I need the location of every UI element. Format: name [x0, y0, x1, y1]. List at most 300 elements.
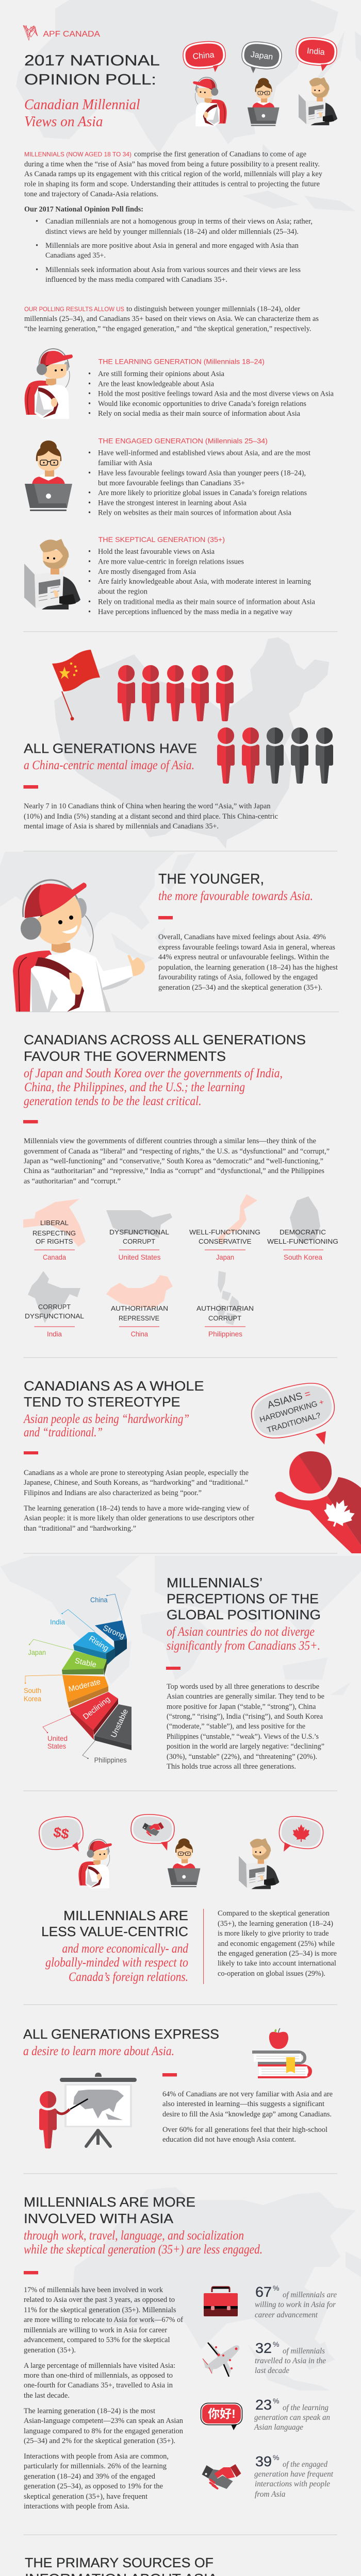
text block: poll findings: distinct views are held by younger millennials (18–24) and older millennials (25–34).: [45, 228, 299, 236]
body text: This holds true across all three generations.: [167, 1762, 296, 1771]
body text: Canadians as a whole are prone to stereotyping Asian people, especially the: [24, 1469, 249, 1477]
stat: 32% travelled: [203, 2340, 326, 2377]
country: United States: United States: [119, 1253, 161, 1261]
body text: favourability ratings of Asia, followed by the engaged: [158, 973, 318, 981]
label: United States: United: [47, 1734, 68, 1742]
text block: introduction: [24, 150, 323, 198]
body text: the engaged generation (25–34) is more: [218, 1950, 337, 1958]
subheading: [23, 1412, 189, 1439]
text block: poll findings: Canadian millennials are not a homogenous group in terms of their views on Asia; rather,: [45, 217, 313, 226]
bullet list: Have perceptions influenced by the mass media in a negative way: [98, 608, 293, 616]
bullet list: Are the least knowledgeable about Asia: [98, 380, 215, 388]
text block: introduction: MILLENNIALS (NOW AGED 18 TO 34): [24, 150, 132, 158]
bullet list: •: [88, 548, 91, 556]
body text: generation (25–34), as opposed to 19% for the: [24, 2482, 163, 2490]
label: India: [50, 1609, 95, 1632]
text block: polling results: to distinguish between younger millennials (18–24), older: [126, 305, 300, 313]
body text: and economic engagement (25%) while: [218, 1940, 335, 1948]
stat: 67% work in Asia: willing to work in Asia for: [255, 2300, 336, 2309]
body text: interactions with people from Asia.: [24, 2502, 129, 2511]
subheading: generation tends to be the least critical.: [24, 1094, 202, 1108]
stat: 23% language: [201, 2397, 330, 2432]
subheading: a China-centric mental image of Asia.: [24, 758, 194, 772]
body text: China as “authoritarian” and “repressive,” India as “corrupt” and “dysfunctional,” and the Philippines: [24, 1167, 324, 1175]
text block: introduction: during a time when the “rise of Asia” has moved from being a future possibility to a present reality.: [24, 160, 320, 168]
body text: more than one-third of millennials, as opposed to: [24, 2371, 173, 2380]
icon: plane: [203, 2343, 239, 2377]
country: Canada: Canada: [43, 1253, 66, 1261]
speech bubble: stereotype: [247, 1377, 339, 1445]
heading: [24, 2194, 195, 2226]
icon: student: [193, 77, 227, 126]
body text: Top words used by all three generations to describe: [167, 1683, 319, 1691]
subheading: the more favourable towards Asia.: [158, 889, 313, 903]
chart: staircase of positioning: Stable: [74, 1656, 97, 1669]
panel: less value-centric: [37, 1813, 337, 1984]
watermark map of Asia: [0, 852, 196, 963]
body text: mental image of Asia is shared by millennials and Canadians 35+.: [24, 822, 219, 831]
panel: China-centric image: [24, 637, 333, 849]
heading: MILLENNIALS ARE: [63, 1908, 188, 1923]
panel: stereotypes: [23, 1377, 361, 1553]
logo: APF Canada: [23, 25, 100, 40]
body text: government of Canada as “liberal” and “respecting of rights,” the U.S. as “dysfunctional” and “corrupt,”: [24, 1147, 330, 1156]
text block: poll findings: •: [36, 217, 38, 226]
logo: APF Canada: APF CANADA: [43, 30, 100, 39]
speech bubble: stereotype: TRADITIONAL?: [266, 1411, 322, 1435]
text block: introduction: As Canada ramps up its engagement with this critical region of the world, millennials will play a key: [24, 170, 323, 178]
panel: government favourability: [23, 1032, 338, 1338]
speech bubble: India: India: [306, 47, 325, 57]
body text: likely to take into account international: [218, 1959, 336, 1968]
icon: apple on books: [252, 2028, 312, 2078]
bullet list: •: [88, 509, 91, 517]
subheading: significantly from Canadians 35+.: [167, 1639, 320, 1653]
body text: skeptical generation (35+), have frequent: [24, 2493, 147, 2501]
label: India: India: [50, 1618, 65, 1626]
icon: man with newspaper: [239, 1838, 279, 1889]
stat: 67% work in Asia: 67: [255, 2284, 272, 2300]
bullet list: Are more likely to prioritize global issues in Canada’s foreign relations: [98, 489, 307, 497]
panel: header: [16, 0, 361, 211]
heading: MILLENNIALS’: [167, 1575, 262, 1590]
country: Philippines: [196, 1271, 254, 1338]
body text: is more likely to give priority to trade: [218, 1929, 329, 1938]
body text: Millennials view the governments of different countries through a similar lens—they think of the: [24, 1137, 316, 1145]
country: South Korea: DEMOCRATIC: [280, 1229, 326, 1236]
bullet list: •: [88, 598, 91, 606]
body text: 11% for the skeptical generation (35+). Millennials: [24, 2306, 176, 2314]
subheading: a desire to learn more about Asia.: [23, 2044, 174, 2058]
stat: 39% interactions: interactions with people: [255, 2480, 330, 2488]
text block: poll findings: Canadians aged 35+.: [45, 251, 106, 260]
panel: more involved with Asia: [24, 2187, 361, 2511]
country: India: India: [47, 1330, 62, 1338]
bullet list: but more favourable feelings than Canadians 35+: [98, 479, 245, 487]
body text: [24, 802, 278, 831]
body text: Filipinos and Indians are also characterized as being “poor.”: [24, 1489, 202, 1497]
chart: staircase of positioning: Declining: [81, 1695, 112, 1721]
speech bubble: maple leaf: [277, 1814, 325, 1852]
bullet list: •: [88, 410, 91, 418]
label: Philippines: Philippines: [94, 1756, 127, 1764]
stat: 67% work in Asia: [204, 2284, 337, 2319]
icon: people row, 7 of 10 red: [118, 665, 333, 784]
bullet list: Hold the least favourable views on Asia: [98, 548, 215, 556]
icon: woman with laptop: [25, 440, 72, 511]
label: United States: [43, 1715, 71, 1750]
panel: global positioning: [0, 1556, 361, 1771]
subheading: Canada’s foreign relations.: [69, 1970, 188, 1984]
country: India: DYSFUNCTIONAL: [25, 1313, 84, 1320]
bullet list: •: [88, 370, 91, 378]
country: China: China: [131, 1330, 148, 1338]
stat: 39% interactions: generation have frequent: [254, 2470, 334, 2479]
subtitle: Canadian Millennial: [24, 96, 140, 113]
country: Canada: RESPECTING: [32, 1230, 76, 1237]
icon: speech bubble ni hao: [201, 2403, 242, 2430]
body text: Asian-language competent—23% can speak an Asian: [24, 2417, 184, 2425]
body text: co-operation on global issues (29%).: [218, 1970, 325, 1978]
text block: poll findings: Millennials are more positive about Asia in general and more engaged with Asia than: [45, 242, 299, 250]
country: Japan: Japan: [216, 1253, 234, 1261]
heading: FAVOUR THE GOVERNMENTS: [24, 1048, 226, 1064]
body text: (“strong,” “rising”), India (“rising”), and South Korea: [167, 1713, 323, 1721]
subheading: and more economically- and: [62, 1942, 188, 1956]
body text: (30%), “unstable” (22%), and “threatening” (20%).: [167, 1753, 317, 1761]
body text: A large percentage of millennials have visited Asia:: [24, 2362, 175, 2370]
body text: the last decade.: [24, 2392, 70, 2400]
body text: express favourable feelings toward Asia in general, whereas: [158, 943, 335, 952]
bullet list: Rely on websites as their main sources of information about Asia: [98, 509, 292, 517]
subheading: [45, 1942, 188, 1984]
speech bubble: China: [182, 40, 226, 72]
country: Japan: WELL-FUNCTIONING: [189, 1229, 260, 1236]
body text: Over 60% for all generations feel that their high-school: [162, 2126, 327, 2134]
body text: also interested in learning—this suggests a significant: [162, 2100, 324, 2108]
stat: 23% language: Asian language: [254, 2423, 303, 2432]
text block: introduction: role in shaping its form and scope. Understanding their attitudes is central to projecting the future: [24, 180, 320, 189]
stat: 39% interactions: from Asia: [255, 2490, 286, 2499]
body text: [158, 933, 338, 992]
heading: [24, 1378, 204, 1410]
bullet list: Have less favourable feelings toward Asia than younger peers (18–24),: [98, 469, 306, 478]
bullet list: Would like economic opportunities to drive Canada’s foreign relations: [98, 400, 306, 408]
bullet list: •: [88, 469, 91, 478]
chart: staircase of positioning: Rising: [87, 1634, 110, 1653]
body text: more positive for Japan (“stable,” “strong”), China: [167, 1703, 316, 1711]
speech bubble: Japan: Japan: [250, 50, 273, 62]
country: South Korea: South Korea: [284, 1253, 322, 1261]
speech bubble: Japan: [240, 40, 283, 73]
icon: presenter with Asia map: [39, 2073, 137, 2148]
subheading: of Japan and South Korea over the governments of India,: [24, 1066, 283, 1080]
text block: poll findings: Our 2017 National Opinion Poll finds:: [24, 205, 143, 213]
body text: related to Asia over the past 3 years, as opposed to: [24, 2296, 175, 2304]
bullet list: Have well-informed and established views about Asia, and are the most: [98, 449, 310, 457]
stat: 67% work in Asia: %: [273, 2284, 279, 2292]
stat: 23% language: %: [273, 2397, 279, 2405]
stat: 67% work in Asia: of millennials are: [283, 2291, 337, 2299]
body text: Asian countries are generally similar. They tend to be: [167, 1692, 324, 1701]
text block: polling results: [24, 305, 319, 333]
panel: the skeptical generation: [24, 535, 316, 616]
body text: (“moderate,” “stable”), and less positive for the: [167, 1722, 305, 1731]
body text: Japan as “well-functioning” and “conservative,” South Korea as “democratic” and “well-functioning,”: [24, 1157, 323, 1165]
country: Japan: [189, 1194, 260, 1261]
body text: [24, 2286, 184, 2511]
watermark map of Asia: [72, 2187, 361, 2391]
subheading: globally-minded with respect to: [45, 1956, 188, 1970]
body text: 64% of Canadians are not very familiar with Asia and are: [162, 2090, 333, 2098]
body text: [162, 2090, 333, 2144]
country: Philippines: CORRUPT: [208, 1315, 241, 1322]
speech bubble: stereotype: ASIANS =: [266, 1388, 312, 1411]
heading: TEND TO STEREOTYPE: [24, 1394, 180, 1410]
label: Philippines: [83, 1741, 127, 1764]
subheading: [24, 1066, 283, 1108]
label: South Korea: Korea: [24, 1694, 41, 1703]
bullet list: Are still forming their opinions about Asia: [98, 370, 225, 378]
speech bubble: money: $$: [52, 1824, 70, 1842]
icon: Canadian figure: [275, 1451, 361, 1553]
icon: handshake: [202, 2464, 241, 2489]
stat: 39% interactions: of the engaged: [283, 2460, 327, 2469]
icon: student: [25, 349, 73, 419]
stat: 32% travelled: 32: [255, 2340, 272, 2356]
label: South Korea: [24, 1675, 62, 1703]
speech bubble: China: China: [192, 50, 215, 61]
body text: desire to fill the Asia “knowledge gap” among Canadians.: [162, 2110, 332, 2119]
text block: poll findings: Millennials seek information about Asia from various sources and their views are less: [45, 266, 301, 274]
subheading: and “traditional.”: [24, 1426, 103, 1439]
heading: ALL GENERATIONS HAVE: [24, 741, 197, 756]
heading: THE SKEPTICAL GENERATION (35+): [99, 535, 225, 544]
chart: staircase of positioning: [62, 1620, 132, 1750]
title: [24, 53, 160, 88]
heading: [167, 1575, 321, 1622]
subheading: China, the Philippines, and the U.S.; the learning: [24, 1080, 245, 1094]
body text: as “authoritarian” and “corrupt.”: [24, 1177, 121, 1185]
body text: (25–34) and 2% for the skeptical generation (35+).: [24, 2437, 175, 2445]
body text: 17% of millennials have been involved in work: [24, 2286, 163, 2294]
body text: [24, 1137, 330, 1185]
body text: [167, 1683, 324, 1771]
label: Japan: Japan: [28, 1648, 46, 1656]
subtitle: Views on Asia: [24, 113, 103, 130]
icon: Chinese flag: [52, 650, 100, 720]
bullet list: •: [88, 608, 91, 616]
heading: CANADIANS ACROSS ALL GENERATIONS: [24, 1032, 306, 1047]
country: China: REPRESSIVE: [119, 1315, 159, 1322]
country: United States: CORRUPT: [123, 1238, 155, 1245]
country: South Korea: [267, 1196, 338, 1261]
text block: introduction: comprise the first generation of Canadians to come of age: [134, 150, 306, 159]
stat: 32% travelled: %: [273, 2340, 279, 2348]
heading: THE YOUNGER,: [158, 871, 264, 887]
bullet list: •: [88, 400, 91, 408]
body text: [24, 1469, 254, 1533]
icon: woman with laptop: [248, 78, 280, 126]
body text: millennials are willing to work in Asia for career: [24, 2326, 167, 2334]
body text: Philippines (“unstable,” “weak”). Views of the U.S.’s: [167, 1733, 319, 1741]
title: 2017 NATIONAL: [24, 53, 160, 69]
subtitle: [24, 96, 140, 130]
bullet list: Hold the most positive feelings toward Asia and the most diverse views on Asia: [98, 390, 334, 398]
stat: 32% travelled: last decade: [255, 2366, 289, 2375]
body text: particularly for millennials. 26% of the learning: [24, 2462, 167, 2470]
heading: CANADIANS AS A WHOLE: [24, 1378, 204, 1394]
country: China: AUTHORITARIAN: [111, 1305, 168, 1312]
speech bubble: India: [295, 36, 338, 71]
chart: staircase of positioning: Unstable: [109, 1708, 130, 1739]
country: Canada: [23, 1199, 86, 1261]
bullet list: Rely on social media as their main source of information about Asia: [98, 410, 301, 418]
chart: staircase of positioning: Moderate: [68, 1677, 102, 1694]
stat: 23% language: 23: [255, 2397, 272, 2413]
icon: large student with thumbs-up: [13, 880, 145, 1012]
body text: position in the world are largely negative: “declining”: [167, 1742, 324, 1751]
panel: the engaged generation: [25, 437, 310, 517]
subheading: of Asian countries do not diverge: [167, 1625, 315, 1639]
heading: [25, 2555, 218, 2576]
speech bubble: stereotype: HARDWORKING +: [259, 1398, 325, 1425]
body text: one-fourth for Canadians 35+, travelled to Asia in: [24, 2381, 173, 2389]
label: Japan: [28, 1639, 74, 1656]
heading: INVOLVED WITH ASIA: [24, 2211, 174, 2226]
body text: Compared to the skeptical generation: [218, 1909, 330, 1918]
body text: Interactions with people from Asia are common,: [24, 2452, 169, 2461]
bullet list: [88, 548, 316, 616]
chart: staircase of positioning: Strong: [102, 1623, 126, 1640]
icon: man with newspaper: [299, 77, 337, 125]
body text: The learning generation (18–24) tends to have a more wide-ranging view of: [24, 1504, 249, 1513]
subheading: Asian people as being “hardworking”: [23, 1412, 189, 1426]
bullet list: Rely on traditional media as their main source of information about Asia: [98, 598, 316, 606]
body text: generation (18–24) and 39% of the engaged: [24, 2472, 156, 2481]
bullet list: Are more value-centric in foreign relations issues: [98, 558, 244, 566]
stat: 39% interactions: %: [273, 2453, 279, 2462]
bullet list: •: [88, 449, 91, 457]
heading: PERCEPTIONS OF THE: [167, 1591, 319, 1606]
body text: Overall, Canadians have mixed feelings about Asia. 49%: [158, 933, 326, 941]
country: United States: DYSFUNCTIONAL: [109, 1229, 169, 1236]
label: China: [90, 1594, 122, 1620]
watermark map of Asia: [16, 0, 361, 211]
body text: [218, 1909, 337, 1978]
country: United States: [106, 1210, 172, 1261]
bullet list: •: [88, 558, 91, 566]
heading: THE PRIMARY SOURCES OF: [25, 2555, 214, 2570]
panel: the learning generation: [25, 349, 334, 419]
heading: ALL GENERATIONS EXPRESS: [23, 2026, 219, 2042]
text block: polling results: “the learning generation,” “the engaged generation,” and “the skeptical generation,” respectively.: [24, 325, 311, 333]
heading: [24, 1032, 306, 1064]
heading: GLOBAL POSITIONING: [167, 1607, 321, 1622]
body text: generation (25–34) and the skeptical generation (35+).: [158, 984, 322, 992]
panel: primary sources of information: [25, 2555, 329, 2576]
label: South Korea: South: [24, 1686, 41, 1694]
stat: 32% travelled: of millennials: [283, 2347, 325, 2355]
country: India: CORRUPT: [38, 1303, 71, 1311]
bullet list: •: [88, 578, 91, 586]
country: Canada: LIBERAL: [40, 1219, 69, 1227]
body text: Asian people: it is more likely than older generations to use descriptors other: [24, 1514, 254, 1522]
heading: THE ENGAGED GENERATION (Millennials 25–34): [99, 437, 268, 445]
icon: woman with laptop: [168, 1838, 200, 1887]
icon: student: [78, 1839, 112, 1888]
body text: Nearly 7 in 10 Canadians think of China when hearing the word “Asia,” with Japan: [24, 802, 271, 810]
body text: advancement, compared to 53% for the skeptical: [24, 2336, 170, 2344]
title: OPINION POLL:: [24, 72, 156, 88]
country: Canada: OF RIGHTS: [36, 1238, 73, 1245]
heading: THE LEARNING GENERATION (Millennials 18–24): [99, 358, 265, 366]
panel: desire to learn: [23, 2026, 333, 2148]
label: China: China: [90, 1596, 108, 1604]
country: Japan: CONSERVATIVE: [199, 1238, 252, 1245]
body text: are more willing to relocate to Asia for work—67% of: [24, 2316, 183, 2324]
country: China: [106, 1275, 173, 1338]
country: Philippines: AUTHORITARIAN: [196, 1305, 254, 1312]
bullet list: •: [88, 380, 91, 388]
label: United States: States: [47, 1742, 66, 1750]
icon: man with newspaper: [24, 539, 80, 609]
body text: generation (35+).: [24, 2346, 76, 2354]
text block: poll findings: [24, 205, 313, 284]
speech bubble: money: [37, 1814, 85, 1852]
bullet list: •: [88, 390, 91, 398]
stat: 67% work in Asia: career advancement: [255, 2311, 318, 2319]
heading: MILLENNIALS ARE MORE: [24, 2194, 195, 2210]
bullet list: •: [88, 489, 91, 497]
subheading: while the skeptical generation (35+) are less engaged.: [24, 2243, 262, 2257]
icon: speech bubble ni hao: 你好!: [208, 2407, 236, 2420]
heading: LESS VALUE-CENTRIC: [41, 1924, 188, 1939]
bullet list: about the region: [98, 588, 148, 596]
text block: polling results: OUR POLLING RESULTS ALLOW US: [24, 306, 124, 313]
icon: briefcase: [204, 2287, 238, 2316]
bullet list: Are mostly disengaged from Asia: [98, 568, 196, 576]
bullet list: •: [88, 568, 91, 576]
text block: poll findings: •: [36, 266, 38, 274]
heading: [41, 1908, 188, 1939]
bullet list: [88, 370, 334, 418]
subheading: [167, 1625, 320, 1653]
text block: introduction: tone and trajectory of Canada-Asia relations.: [24, 190, 158, 198]
country: Philippines: Philippines: [208, 1330, 242, 1338]
body text: Japanese, Chinese, and South Koreans, as “hardworking” and “traditional.”: [24, 1479, 248, 1487]
speech bubble: handshake: [130, 1813, 175, 1851]
stat: 23% language: of the learning: [283, 2403, 329, 2412]
body text: population, the learning generation (18–24) has the highest: [158, 963, 338, 972]
bullet list: Are fairly knowledgeable about Asia, with moderate interest in learning: [98, 578, 311, 586]
body text: than “traditional” and “hardworking.”: [24, 1524, 136, 1533]
panel: the younger, the more favourable: [0, 852, 338, 1012]
text block: poll findings: influenced by the mass media compared with Canadians 35+.: [45, 276, 227, 284]
stat: 23% language: generation can speak an: [254, 2413, 330, 2422]
watermark map of China: [54, 637, 329, 849]
country: South Korea: WELL-FUNCTIONING: [267, 1238, 338, 1245]
stat: 32% travelled: travelled to Asia in the: [255, 2357, 326, 2365]
text block: poll findings: •: [36, 242, 38, 250]
body text: (10%) and India (5%) standing at a distant second and third place. This China-centric: [24, 812, 278, 821]
body text: The learning generation (18–24) is the most: [24, 2407, 155, 2415]
subheading: through work, travel, language, and socialization: [24, 2229, 244, 2243]
bullet list: •: [88, 499, 91, 507]
stat: 39% interactions: 39: [255, 2453, 272, 2469]
bullet list: familiar with Asia: [98, 459, 153, 467]
body text: 44% express neutral or unfavourable feelings. Within the: [158, 953, 329, 961]
